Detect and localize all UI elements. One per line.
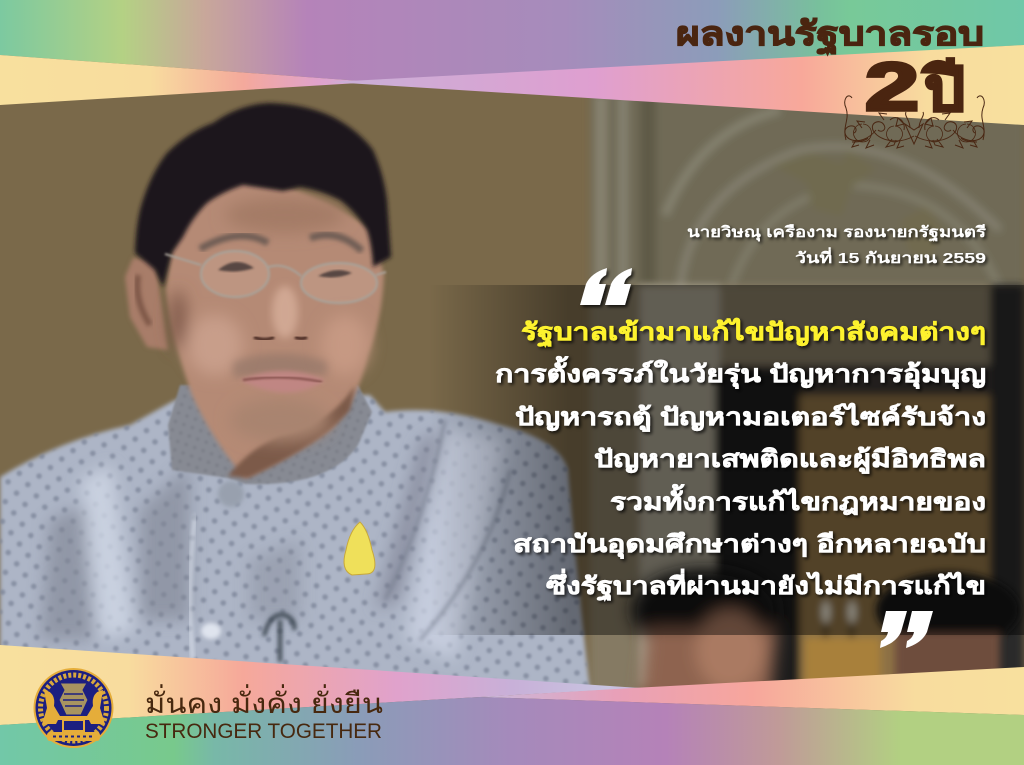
- man: glasses: [165, 251, 386, 303]
- man: eyes: [218, 262, 254, 272]
- man: hair: [135, 103, 391, 287]
- bottom colour banner: [0, 645, 1024, 765]
- man: pen in pocket: [264, 615, 294, 662]
- quote: line 6: สถาบันอุดมศึกษาต่างๆ อีกหลายฉบับ: [513, 531, 986, 560]
- icon: closing quote mark: [880, 611, 933, 648]
- icon: opening quote mark: [580, 268, 632, 305]
- title: numeral 2: 2: [865, 49, 919, 125]
- man: head: [125, 103, 391, 478]
- person left: [631, 568, 779, 700]
- man: lower button: [201, 623, 221, 639]
- title: ผลงานรัฐบาลรอบ: [676, 15, 984, 55]
- person right: [876, 572, 1020, 700]
- man: nose: [272, 286, 298, 338]
- man: face: [166, 177, 384, 478]
- background: architectural wall: [590, 90, 1024, 290]
- slogan: English: STRONGER TOGETHER: [145, 720, 382, 743]
- quote: line 5: รวมทั้งการแก้ไขกฎหมายของ: [610, 483, 986, 516]
- man: upper lip shadow: [233, 354, 327, 377]
- background: wall and people under the panel: [590, 285, 1024, 695]
- top colour banner: [0, 0, 1024, 125]
- speaker name: นายวิษณุ เครืองาม รองนายกรัฐมนตรี: [687, 223, 987, 242]
- man: jacket button: [218, 481, 244, 507]
- quote: line 3: ปัญหารถตู้ ปัญหามอเตอร์ไซค์รับจ้าง: [515, 402, 986, 432]
- icon: yellow lapel pin: [344, 522, 375, 575]
- title: years: ปี: [921, 56, 965, 123]
- icon: government seal: [34, 668, 114, 748]
- speech date: วันที่ 15 กันยายน 2559: [795, 247, 986, 267]
- quote: line 7: ซึ่งรัฐบาลที่ผ่านมายังไม่มีการแก้ไข: [546, 568, 986, 602]
- quote: highlighted line: รัฐบาลเข้ามาแก้ไขปัญหาสังคมต่างๆ: [521, 317, 986, 348]
- quote: line 2: การตั้งครรภ์ในวัยรุ่น ปัญหาการอุ้มบุญ: [495, 355, 986, 390]
- icon: ornament flourish: [845, 96, 984, 148]
- slogan: Thai: มั่นคง มั่งคั่ง ยั่งยืน: [145, 684, 383, 719]
- quote text: [495, 317, 986, 602]
- man: brows: [200, 236, 268, 249]
- man: nostrils: [254, 337, 307, 340]
- quote: line 4: ปัญหายาเสพติดและผู้มีอิทธิพล: [594, 446, 986, 474]
- man: ear: [125, 258, 168, 350]
- man: mouth: [240, 371, 325, 392]
- man: shaded face detail: [170, 197, 369, 442]
- man: collar: [168, 385, 372, 484]
- dark quote panel: [430, 285, 1024, 635]
- man: jacket: [0, 395, 590, 690]
